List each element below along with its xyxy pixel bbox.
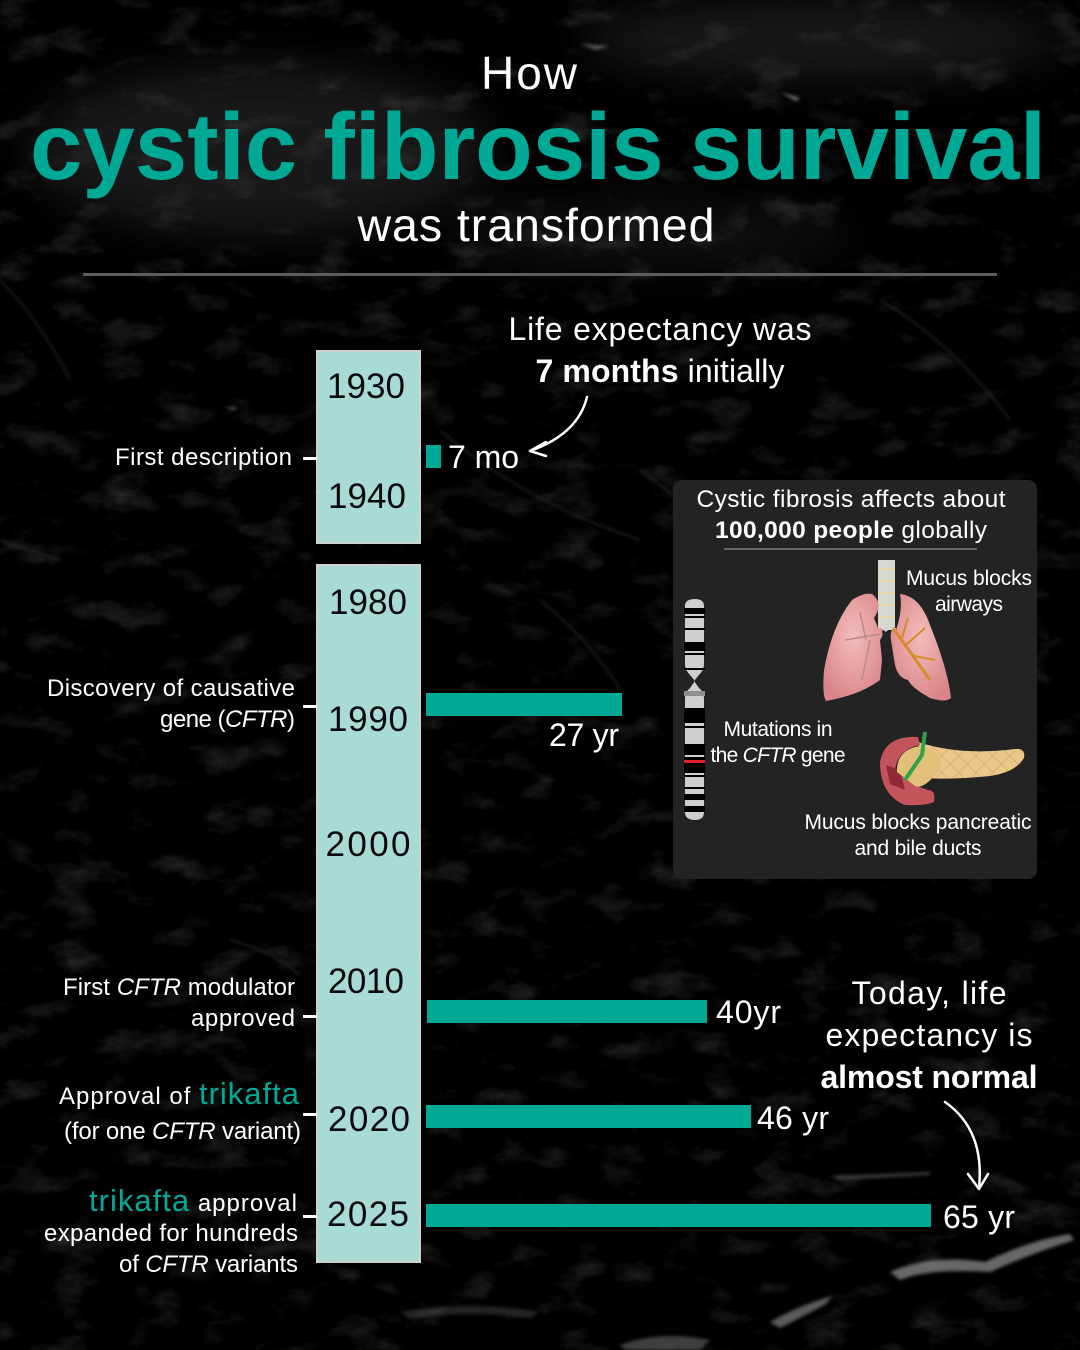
- event label: first modulator: First CFTR modulator: [63, 974, 295, 1001]
- event label: first description: First description: [115, 444, 292, 471]
- callout: today: almost normal: [820, 1059, 1038, 1095]
- panel heading: 100,000 people globally: [715, 517, 988, 544]
- timeline column: 1980-2025: 2025: [327, 1195, 409, 1234]
- icon: pancreas and duodenum: [880, 732, 1024, 805]
- arrow: to 7 mo: [530, 397, 587, 456]
- panel: about cystic fibrosis: [673, 480, 1037, 879]
- title: was transformed: [356, 199, 714, 251]
- panel heading: Cystic fibrosis affects about: [696, 486, 1006, 513]
- timeline column: 1930-1940: 1940: [328, 477, 406, 516]
- timeline column: 1980-2025: 2020: [328, 1100, 410, 1139]
- title: How: [481, 47, 578, 99]
- event label: discovery of gene: [47, 675, 317, 733]
- panel heading: [696, 486, 1006, 544]
- timeline column: 1930-1940: 1930: [327, 367, 405, 406]
- callout: today: expectancy is: [826, 1017, 1032, 1053]
- label: gene mutations: the CFTR gene: [710, 744, 846, 767]
- bar: 40 yr: 40yr: [716, 994, 781, 1030]
- label: airways: Mucus blocks: [906, 567, 1032, 590]
- label: gene mutations: [710, 718, 846, 767]
- callout: today: Today, life: [852, 975, 1006, 1011]
- label: airways: [906, 567, 1032, 616]
- label: gene mutations: Mutations in: [724, 718, 832, 741]
- event label: trikafta expanded: expanded for hundreds: [44, 1220, 298, 1247]
- event label: discovery of gene: Discovery of causative: [47, 675, 295, 702]
- event label: discovery of gene: gene (CFTR): [160, 706, 295, 733]
- event label: trikafta expanded: trikafta approval: [89, 1183, 297, 1218]
- callout: initial life expectancy: Life expectancy was: [508, 311, 812, 347]
- bar: 65 yr: [426, 1199, 1015, 1235]
- callout: initial life expectancy: 7 months initially: [536, 353, 784, 389]
- label: pancreatic ducts: Mucus blocks pancreatic: [804, 811, 1032, 834]
- event label: trikafta expanded: of CFTR variants: [119, 1251, 298, 1278]
- event label: trikafta expanded: [44, 1183, 317, 1278]
- bar: 40 yr: [427, 994, 781, 1030]
- event label: first modulator: [63, 974, 317, 1032]
- icon: chromosome: [684, 599, 705, 820]
- bar: 27 yr: 27 yr: [549, 717, 619, 753]
- bar: 46 yr: [426, 1100, 829, 1136]
- callout: today: [820, 975, 1038, 1095]
- timeline column: 1980-2025: 2000: [326, 825, 410, 864]
- bar: 27 yr: [426, 693, 622, 753]
- timeline column: 1930-1940: [317, 351, 420, 543]
- callout: initial life expectancy: [508, 311, 812, 389]
- event label: first modulator: approved: [191, 1005, 295, 1032]
- arrow: to 65 yr: [945, 1102, 988, 1189]
- event label: trikafta approval: Approval of trikafta: [59, 1076, 300, 1111]
- label: pancreatic ducts: [804, 811, 1032, 860]
- label: pancreatic ducts: and bile ducts: [854, 837, 982, 860]
- event label: trikafta approval: [59, 1076, 317, 1145]
- timeline column: 1980-2025: 2010: [328, 962, 404, 1001]
- event label: trikafta approval: (for one CFTR variant): [64, 1118, 301, 1145]
- bar: 7 mo: 7 mo: [448, 439, 519, 475]
- title: cystic fibrosis survival: [30, 94, 1046, 200]
- timeline column: 1980-2025: [317, 565, 420, 1262]
- icon: lungs: [823, 560, 951, 701]
- title: [30, 47, 1046, 251]
- bar: 46 yr: 46 yr: [757, 1100, 829, 1136]
- timeline column: 1980-2025: 1990: [328, 700, 408, 739]
- label: airways: airways: [935, 593, 1003, 616]
- bar: 65 yr: 65 yr: [943, 1199, 1015, 1235]
- timeline column: 1980-2025: 1980: [329, 583, 407, 622]
